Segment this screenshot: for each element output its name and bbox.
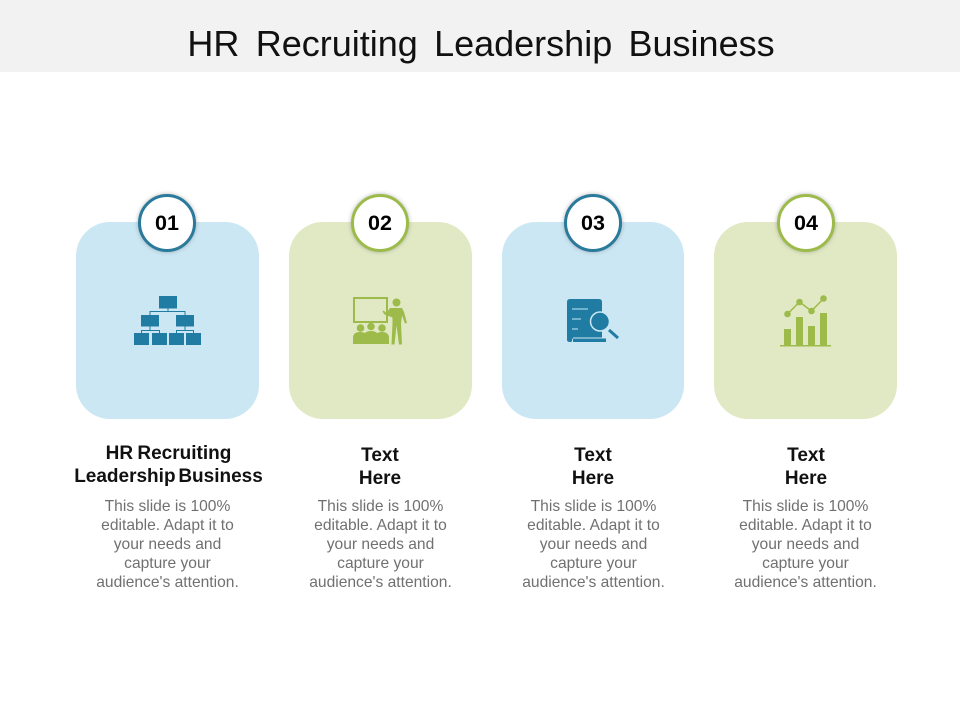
heading 3: Here xyxy=(572,468,614,488)
body text 4: audience's attention. xyxy=(734,574,877,591)
card 2 background xyxy=(289,222,472,419)
icon: bar and line chart xyxy=(780,295,831,346)
number badge 02 xyxy=(351,194,409,252)
heading 1: HR Recruiting xyxy=(106,442,231,464)
body text 1: editable. Adapt it to xyxy=(101,517,234,534)
body text 2: audience's attention. xyxy=(309,574,452,591)
body text 1 xyxy=(96,498,239,591)
body text 4: This slide is 100% xyxy=(743,498,868,515)
body text 1: This slide is 100% xyxy=(105,498,230,515)
heading 4: Here xyxy=(785,468,827,488)
body text 4: editable. Adapt it to xyxy=(739,517,872,534)
body text 1: capture your xyxy=(124,555,211,572)
number badge 02: 02 xyxy=(368,211,392,235)
body text 3 xyxy=(522,498,665,591)
icon: org chart xyxy=(134,296,201,345)
body text 1: your needs and xyxy=(114,536,221,553)
heading 3 xyxy=(572,444,614,488)
number badge 01: 01 xyxy=(155,211,179,235)
body text 2 xyxy=(309,498,452,591)
body text 3: This slide is 100% xyxy=(531,498,656,515)
number badge 01 xyxy=(138,194,196,252)
body text 4: capture your xyxy=(762,555,849,572)
body text 3: audience's attention. xyxy=(522,574,665,591)
heading 2: Text xyxy=(361,444,399,466)
number badge 04 xyxy=(777,194,835,252)
title: HR Recruiting Leadership Business xyxy=(187,23,775,64)
heading 2 xyxy=(359,444,401,488)
heading 2: Here xyxy=(359,468,401,488)
heading 1: Leadership Business xyxy=(74,466,263,486)
body text 4: your needs and xyxy=(752,536,859,553)
number badge 04: 04 xyxy=(794,211,818,235)
body text 4 xyxy=(734,498,877,591)
body text 2: your needs and xyxy=(327,536,434,553)
number badge 03: 03 xyxy=(581,211,605,235)
body text 1: audience's attention. xyxy=(96,574,239,591)
heading 4: Text xyxy=(787,444,825,466)
body text 3: your needs and xyxy=(540,536,647,553)
card 4 background xyxy=(714,222,897,419)
body text 2: This slide is 100% xyxy=(318,498,443,515)
icon: document with magnifier xyxy=(567,299,619,342)
body text 2: capture your xyxy=(337,555,424,572)
number badge 03 xyxy=(564,194,622,252)
card 3 background xyxy=(502,222,684,419)
card 1 background xyxy=(76,222,259,419)
heading 1 xyxy=(74,442,263,486)
icon: presenter with audience xyxy=(353,297,407,344)
heading 4 xyxy=(785,444,827,488)
body text 3: editable. Adapt it to xyxy=(527,517,660,534)
title bar xyxy=(0,0,960,72)
body text 3: capture your xyxy=(550,555,637,572)
body text 2: editable. Adapt it to xyxy=(314,517,447,534)
heading 3: Text xyxy=(574,444,612,466)
